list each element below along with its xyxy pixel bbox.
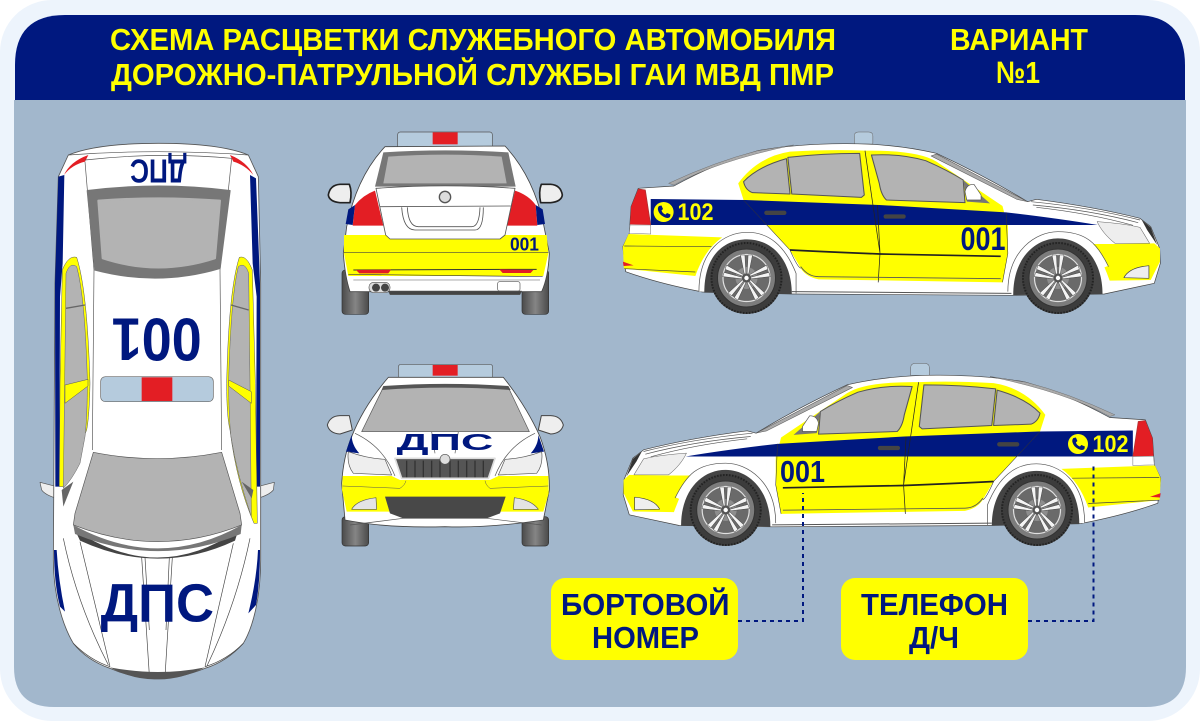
blue stripes (346, 205, 545, 225)
light bar (398, 364, 493, 384)
light bar (398, 132, 492, 152)
mirrors (328, 184, 562, 203)
grille (395, 454, 495, 478)
hood lines (63, 538, 250, 677)
title: СХЕМА РАСЦВЕТКИ СЛУЖЕБНОГО АВТОМОБИЛЯ (110, 22, 836, 57)
arrow: side number leader line (738, 493, 803, 621)
variant heading (950, 22, 1088, 90)
badge (439, 191, 451, 203)
arrow: duty phone leader line (1028, 465, 1094, 621)
fog lights (352, 498, 538, 509)
windshield (73, 452, 242, 559)
body (342, 377, 549, 527)
yellow bumper (342, 476, 549, 512)
callout: side number: БОРТОВОЙ (561, 586, 730, 622)
title (110, 22, 836, 92)
reflectors (356, 269, 533, 273)
text: ДПС inverted on trunk: ДПС (130, 151, 187, 188)
text: 001 inverted on roof: 001 (112, 305, 202, 372)
exhaust pipes (369, 282, 390, 293)
wheels (710, 242, 1094, 314)
lower air intake (385, 497, 506, 518)
callout: side number: НОМЕР (592, 620, 699, 655)
mirrors (327, 416, 563, 434)
title: ДОРОЖНО-ПАТРУЛЬНОЙ СЛУЖБЫ ГАИ МВД ПМР (111, 56, 834, 92)
red tail-lamp corners (64, 155, 253, 175)
lower lip (350, 518, 542, 525)
callout: side number (551, 578, 738, 660)
car body outline (53, 143, 261, 678)
car: right side view (623, 132, 1160, 314)
front bumper shadow (110, 667, 205, 679)
header band (15, 15, 1185, 100)
body lines (68, 152, 248, 450)
tires (342, 517, 549, 546)
text: 001: 001 (780, 454, 825, 489)
variant heading: ВАРИАНТ (950, 22, 1088, 57)
lower bumper (353, 280, 540, 295)
rear window (375, 150, 516, 187)
tires (342, 270, 549, 314)
trunk lid (376, 186, 515, 239)
car: top view (40, 143, 274, 679)
roof light bar (101, 377, 213, 402)
rear window (87, 186, 230, 278)
variant heading: №1 (996, 55, 1040, 90)
headlights (348, 452, 542, 475)
tail lamps (353, 191, 537, 226)
wheels (690, 474, 1073, 546)
callout: duty phone: Д/Ч (909, 620, 959, 655)
car: left side view (623, 363, 1161, 546)
car: front view (327, 364, 563, 546)
text: 001: 001 (510, 233, 539, 254)
car: rear view (328, 132, 562, 314)
body (343, 146, 549, 292)
text: ДПС: ДПС (397, 429, 493, 455)
callout: duty phone (841, 578, 1028, 660)
text: 102: 102 (678, 199, 714, 226)
hood lines (355, 432, 535, 476)
text: 102: 102 (1092, 431, 1128, 458)
blue stripes (346, 435, 544, 453)
phone icon (654, 202, 674, 222)
text: ДПС on hood: ДПС (101, 575, 214, 634)
windshield (362, 384, 529, 432)
blue side stripes (54, 175, 260, 613)
phone icon (1068, 434, 1088, 454)
yellow band (344, 235, 548, 276)
left side windows (59, 257, 90, 507)
right side windows (227, 257, 257, 523)
icon: side mirrors (40, 482, 274, 499)
callout: duty phone: ТЕЛЕФОН (861, 587, 1008, 622)
text: 001: 001 (960, 221, 1006, 257)
